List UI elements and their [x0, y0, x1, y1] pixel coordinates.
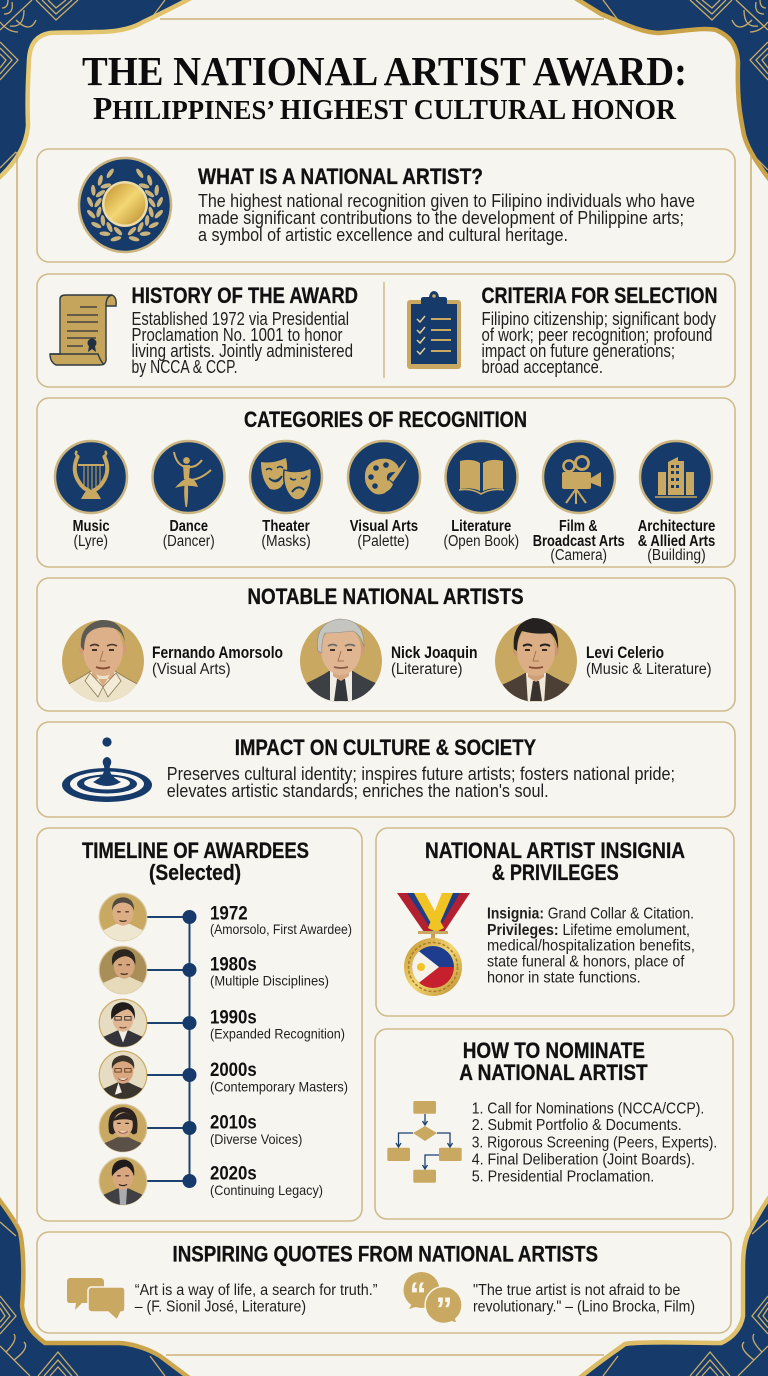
entry: 1972	[210, 903, 352, 937]
label: film and broadcast arts	[533, 518, 625, 564]
description text	[198, 191, 695, 245]
entry: 2020s	[210, 1163, 323, 1198]
timeline axis	[147, 917, 190, 1181]
panel: what is a national artist	[37, 149, 735, 262]
insignia text	[487, 905, 695, 987]
panel: how to nominate	[375, 1029, 733, 1219]
name: Levi Celerio: Levi Celerio	[586, 644, 664, 662]
entry: 2000s: (Contemporary Masters)	[210, 1079, 348, 1095]
history text: by NCCA & CCP.	[132, 357, 238, 377]
icon: round quote bubbles	[404, 1272, 462, 1329]
name: Nick Joaquin	[391, 644, 478, 678]
icon: round quote bubbles: “	[410, 1276, 426, 1314]
nomination steps: 2. Submit Portfolio & Documents.	[472, 1117, 682, 1134]
label: architecture and allied arts: (Building)	[647, 547, 706, 564]
nomination steps: 4. Final Deliberation (Joint Boards).	[472, 1151, 695, 1168]
nomination steps: 5. Presidential Proclamation.	[472, 1169, 654, 1186]
panel: impact on culture and society	[37, 722, 735, 817]
icon: clipboard checklist	[407, 291, 461, 369]
icon: water ripple	[62, 737, 152, 802]
insignia text: Privileges: Lifetime emolument,	[487, 922, 690, 939]
panel: notable national artists	[37, 578, 735, 711]
heading: WHAT IS A NATIONAL ARTIST?	[198, 164, 483, 189]
panel: insignia and privileges	[376, 828, 734, 1016]
impact text	[167, 764, 675, 801]
heading: TIMELINE OF AWARDEES	[82, 838, 309, 863]
heading: HISTORY OF THE AWARD	[132, 283, 358, 308]
description text: made significant contributions to the development of Philippine arts;	[198, 208, 684, 228]
portrait: 2010s	[97, 1104, 149, 1154]
criteria text: of work; peer recognition; profound	[482, 325, 712, 345]
impact text: elevates artistic standards; enriches the nation's soul.	[167, 781, 549, 801]
description text: a symbol of artistic excellence and cultural heritage.	[198, 225, 568, 245]
quote: F. Sionil José: – (F. Sionil José, Literature)	[135, 1299, 306, 1316]
heading: IMPACT ON CULTURE & SOCIETY	[235, 735, 536, 760]
criteria text: Filipino citizenship; significant body	[482, 309, 716, 329]
nomination steps	[472, 1100, 717, 1186]
panel: inspiring quotes	[37, 1232, 731, 1333]
entry: 1980s: 1980s	[210, 955, 257, 976]
title: PHILIPPINES’ HIGHEST CULTURAL HONOR	[93, 90, 677, 126]
category: theater	[250, 441, 322, 513]
heading: NOTABLE NATIONAL ARTISTS	[247, 584, 524, 609]
heading	[82, 838, 309, 885]
heading: CATEGORIES OF RECOGNITION	[244, 407, 527, 432]
heading: NATIONAL ARTIST INSIGNIA	[425, 838, 685, 863]
entry: 1972: (Amorsolo, First Awardee)	[210, 921, 352, 937]
entry: 2010s: (Diverse Voices)	[210, 1131, 302, 1147]
name: Fernando Amorsolo: (Visual Arts)	[152, 661, 231, 678]
icon: process flowchart	[387, 1101, 462, 1183]
label: architecture and allied arts	[638, 518, 716, 564]
heading	[425, 838, 685, 885]
label: music	[73, 518, 110, 550]
category: dance	[152, 441, 224, 513]
heading: HOW TO NOMINATE	[463, 1038, 645, 1063]
name: Fernando Amorsolo: Fernando Amorsolo	[152, 644, 283, 662]
nomination steps: 3. Rigorous Screening (Peers, Experts).	[472, 1134, 717, 1151]
label: film and broadcast arts: Broadcast Arts	[533, 533, 625, 550]
label: dance	[163, 518, 215, 550]
entry: 1990s	[210, 1008, 345, 1042]
category: literature	[446, 441, 518, 513]
quote: F. Sionil José: “Art is a way of life, a search for truth.”	[135, 1282, 378, 1299]
label: visual arts: (Palette)	[357, 533, 409, 550]
quote: Lino Brocka: "The true artist is not afraid to be	[473, 1282, 680, 1299]
heading: CRITERIA FOR SELECTION	[482, 283, 718, 308]
history text	[132, 309, 353, 377]
entry: 1980s: (Multiple Disciplines)	[210, 973, 329, 989]
heading: INSPIRING QUOTES FROM NATIONAL ARTISTS	[172, 1242, 598, 1267]
entry: 2020s: (Continuing Legacy)	[210, 1182, 323, 1198]
panel: categories of recognition	[37, 398, 735, 567]
description text: The highest national recognition given to Filipino individuals who have	[198, 191, 695, 211]
label: literature: Literature	[451, 518, 512, 535]
icon: round quote bubbles: ”	[436, 1291, 452, 1329]
name: Nick Joaquin: Nick Joaquin	[391, 644, 478, 662]
criteria text: impact on future generations;	[482, 341, 675, 361]
heading: A NATIONAL ARTIST	[459, 1060, 648, 1085]
insignia text: state funeral & honors, place of	[487, 954, 685, 971]
portrait: 1980s	[97, 946, 149, 996]
icon: medal with ribbon	[397, 893, 470, 996]
label: film and broadcast arts: (Camera)	[550, 547, 607, 564]
portrait: 1990s	[97, 999, 149, 1049]
quote: Lino Brocka	[473, 1282, 695, 1316]
title: THE NATIONAL ARTIST AWARD:	[82, 48, 687, 94]
category: music	[55, 441, 127, 513]
entry: 1990s: 1990s	[210, 1008, 257, 1029]
heading	[459, 1038, 648, 1085]
entry: 2000s	[210, 1060, 348, 1095]
name: Levi Celerio	[586, 644, 712, 678]
label: theater	[261, 518, 311, 550]
label: film and broadcast arts: Film &	[559, 518, 598, 535]
insignia text: medical/hospitalization benefits,	[487, 938, 695, 955]
title	[82, 48, 687, 126]
portrait: Levi Celerio	[495, 618, 577, 702]
panel: history and criteria	[37, 274, 735, 387]
label: music: (Lyre)	[74, 533, 108, 550]
portrait: 1972	[97, 893, 149, 943]
history text: living artists. Jointly administered	[132, 341, 353, 361]
portrait: 2000s	[97, 1051, 149, 1101]
label: literature: (Open Book)	[444, 533, 519, 550]
history text: Proclamation No. 1001 to honor	[132, 325, 343, 345]
entry: 2010s: 2010s	[210, 1112, 257, 1133]
label: theater: (Masks)	[261, 533, 311, 550]
label: dance: Dance	[170, 518, 208, 535]
entry: 1990s: (Expanded Recognition)	[210, 1026, 345, 1042]
category: architecture and allied arts	[640, 441, 712, 513]
entry: 2020s: 2020s	[210, 1163, 257, 1184]
heading: & PRIVILEGES	[492, 860, 619, 885]
icon: scroll	[50, 295, 116, 365]
entry: 2010s	[210, 1112, 302, 1147]
quote: F. Sionil José	[135, 1282, 378, 1316]
impact text: Preserves cultural identity; inspires future artists; fosters national pride;	[167, 764, 675, 784]
label: visual arts: Visual Arts	[350, 518, 418, 535]
icon: square speech bubbles	[67, 1278, 125, 1320]
label: theater: Theater	[262, 518, 310, 535]
portrait: Fernando Amorsolo	[62, 620, 144, 702]
history text: Established 1972 via Presidential	[132, 309, 349, 329]
label: visual arts	[350, 518, 418, 550]
label: literature	[444, 518, 519, 550]
insignia text: honor in state functions.	[487, 970, 641, 987]
criteria text: broad acceptance.	[482, 357, 603, 377]
quote: Lino Brocka: revolutionary." – (Lino Brocka, Film)	[473, 1299, 695, 1316]
entry: 1972: 1972	[210, 903, 248, 924]
label: music: Music	[73, 518, 110, 535]
category: film and broadcast arts	[543, 441, 615, 513]
icon: gold medal with laurel	[79, 158, 171, 252]
criteria text	[482, 309, 716, 377]
name: Levi Celerio: (Music & Literature)	[586, 661, 712, 678]
portrait: 2020s	[97, 1157, 149, 1207]
insignia text: Insignia: Grand Collar & Citation.	[487, 905, 694, 922]
label: dance: (Dancer)	[163, 533, 215, 550]
portrait: Nick Joaquin	[297, 619, 385, 705]
label: architecture and allied arts: Architecture	[638, 518, 716, 535]
label: architecture and allied arts: & Allied Arts	[638, 533, 715, 550]
entry: 1980s	[210, 955, 329, 989]
panel: timeline of awardees	[37, 828, 362, 1221]
timeline nodes	[182, 910, 196, 1188]
nomination steps: 1. Call for Nominations (NCCA/CCP).	[472, 1100, 704, 1117]
name: Fernando Amorsolo	[152, 644, 283, 678]
category: visual arts	[348, 441, 420, 513]
name: Nick Joaquin: (Literature)	[391, 661, 462, 678]
heading: (Selected)	[149, 860, 241, 885]
entry: 2000s: 2000s	[210, 1060, 257, 1081]
